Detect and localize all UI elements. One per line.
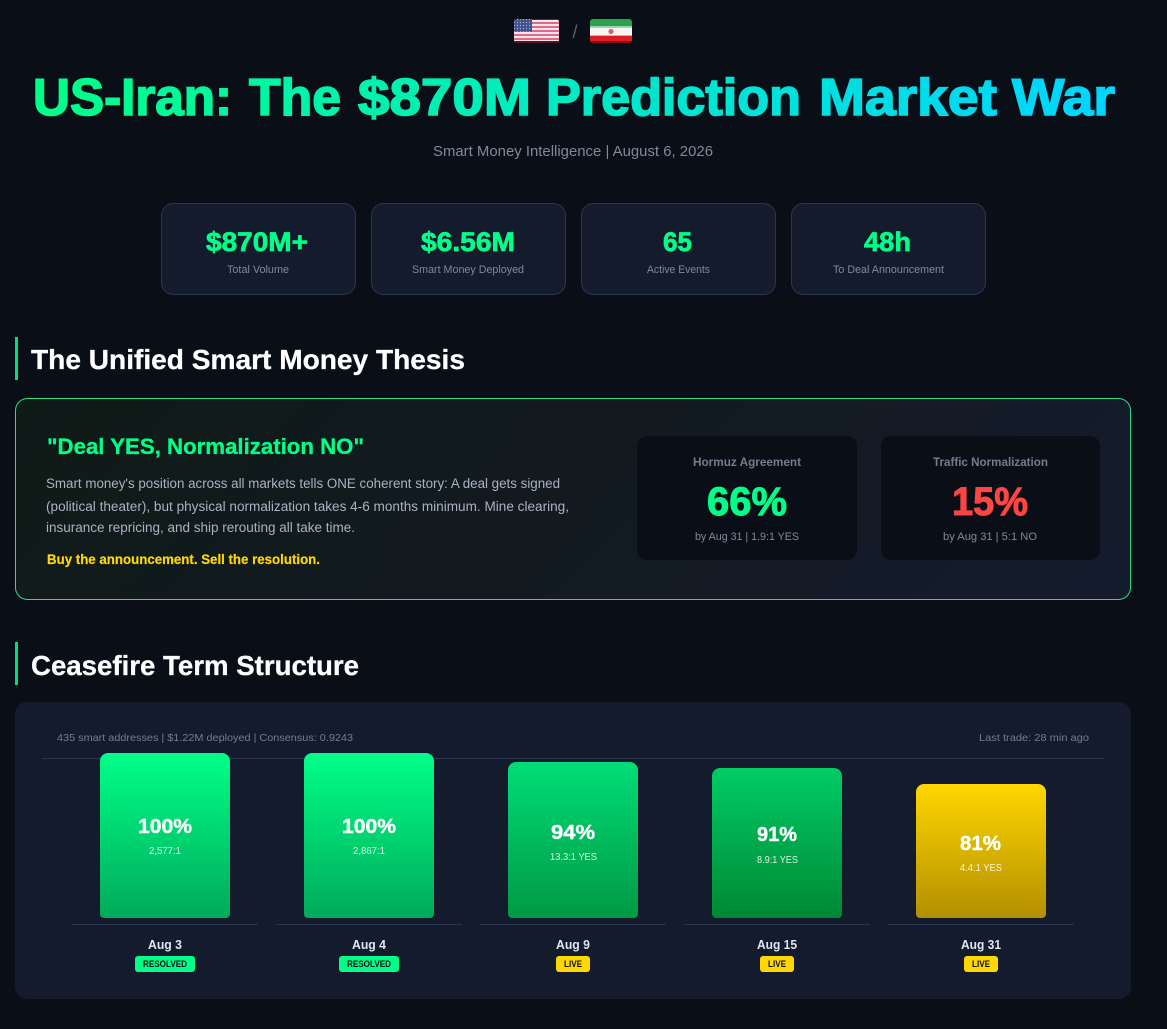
column: Aug 15: Aug 15 bbox=[757, 938, 797, 952]
column: Aug 9: LIVE bbox=[564, 959, 582, 969]
thesis body: (political theater), but physical normalization takes 4-6 months minimum. Mine clearing, bbox=[46, 499, 569, 514]
column: Aug 3: 2,577:1 bbox=[149, 845, 181, 857]
column: Aug 3: Aug 3 bbox=[148, 938, 182, 952]
card: Hormuz agreement bbox=[637, 436, 857, 560]
column: Aug 31: 4.4:1 YES bbox=[960, 862, 1002, 874]
thesis takeaway: Buy the announcement. Sell the resolution. bbox=[47, 552, 320, 567]
column: Aug 31 bbox=[888, 784, 1074, 972]
column: Aug 4: 2,867:1 bbox=[353, 845, 385, 857]
stat card: smart money deployed: Smart Money Deployed bbox=[412, 264, 524, 276]
title: Market bbox=[819, 69, 997, 127]
separator slash: / bbox=[572, 22, 578, 42]
column: Aug 4: RESOLVED bbox=[347, 959, 391, 969]
column: Aug 9: 94% bbox=[551, 822, 595, 844]
stat card: active events: 65 bbox=[663, 227, 692, 257]
card: Hormuz agreement: 66% bbox=[707, 480, 787, 524]
chart meta right: Last trade: 28 min ago bbox=[979, 732, 1089, 744]
stat card: total volume: Total Volume bbox=[227, 264, 289, 276]
icon: Iran flag bbox=[590, 19, 632, 43]
column: Aug 3: 100% bbox=[138, 816, 192, 838]
flags header bbox=[514, 19, 632, 43]
panel: thesis bbox=[16, 398, 1130, 600]
column: Aug 15 bbox=[684, 768, 870, 972]
thesis body: insurance repricing, and ship rerouting all take time. bbox=[46, 520, 355, 535]
stat card: deal announcement bbox=[792, 204, 986, 294]
thesis body: Smart money's position across all markets tells ONE coherent story: A deal gets signed bbox=[46, 476, 560, 491]
stat card: active events: Active Events bbox=[647, 264, 710, 276]
column: Aug 4: 100% bbox=[342, 816, 396, 838]
card: traffic normalization: Traffic Normalization bbox=[933, 457, 1048, 469]
card: Hormuz agreement: Hormuz Agreement bbox=[693, 457, 801, 469]
heading: unified thesis: The Unified Smart Money Thesis bbox=[31, 344, 465, 375]
column: Aug 15: 91% bbox=[757, 824, 797, 846]
column: Aug 15: 8.9:1 YES bbox=[757, 854, 798, 866]
stat card: deal announcement: To Deal Announcement bbox=[833, 264, 944, 276]
title bbox=[33, 69, 1115, 127]
card: traffic normalization: by Aug 31 | 5:1 NO bbox=[943, 531, 1037, 543]
column: Aug 15: LIVE bbox=[768, 959, 786, 969]
stat card: total volume: $870M+ bbox=[206, 227, 308, 257]
card: traffic normalization: 15% bbox=[952, 480, 1028, 524]
title: The bbox=[249, 69, 341, 127]
card: Hormuz agreement: by Aug 31 | 1.9:1 YES bbox=[695, 531, 799, 543]
chart meta left: 435 smart addresses | $1.22M deployed | Consensus: 0.9243 bbox=[57, 732, 353, 744]
heading: ceasefire term structure bbox=[15, 642, 359, 685]
column: Aug 3: RESOLVED bbox=[143, 959, 187, 969]
card: traffic normalization bbox=[881, 436, 1100, 560]
stat card: smart money deployed: $6.56M bbox=[421, 227, 515, 257]
panel: ceasefire chart bbox=[15, 702, 1131, 999]
column: Aug 31: LIVE bbox=[972, 959, 990, 969]
heading: ceasefire term structure: Ceasefire Term Structure bbox=[31, 650, 359, 681]
column: Aug 4 bbox=[276, 753, 462, 972]
column: Aug 9: Aug 9 bbox=[556, 938, 590, 952]
title: War bbox=[1012, 69, 1115, 127]
subtitle: Smart Money Intelligence | August 6, 2026 bbox=[433, 144, 713, 160]
stat card: smart money deployed bbox=[372, 204, 566, 294]
column: Aug 3 bbox=[72, 753, 258, 972]
thesis body bbox=[46, 476, 569, 535]
column: Aug 9 bbox=[480, 762, 666, 972]
stat card: active events bbox=[582, 204, 776, 294]
title: US-Iran: bbox=[33, 69, 232, 127]
icon: US flag bbox=[514, 19, 559, 43]
heading: unified thesis bbox=[15, 337, 465, 380]
column: Aug 31: 81% bbox=[960, 833, 1001, 855]
column: Aug 31: Aug 31 bbox=[961, 938, 1001, 952]
title: $870M bbox=[358, 69, 531, 127]
stat card: total volume bbox=[162, 204, 356, 294]
column: Aug 9: 13.3:1 YES bbox=[550, 851, 597, 863]
title: Prediction bbox=[546, 69, 801, 127]
stat card: deal announcement: 48h bbox=[864, 227, 911, 257]
thesis quote: "Deal YES, Normalization NO" bbox=[47, 434, 364, 459]
column: Aug 4: Aug 4 bbox=[352, 938, 386, 952]
